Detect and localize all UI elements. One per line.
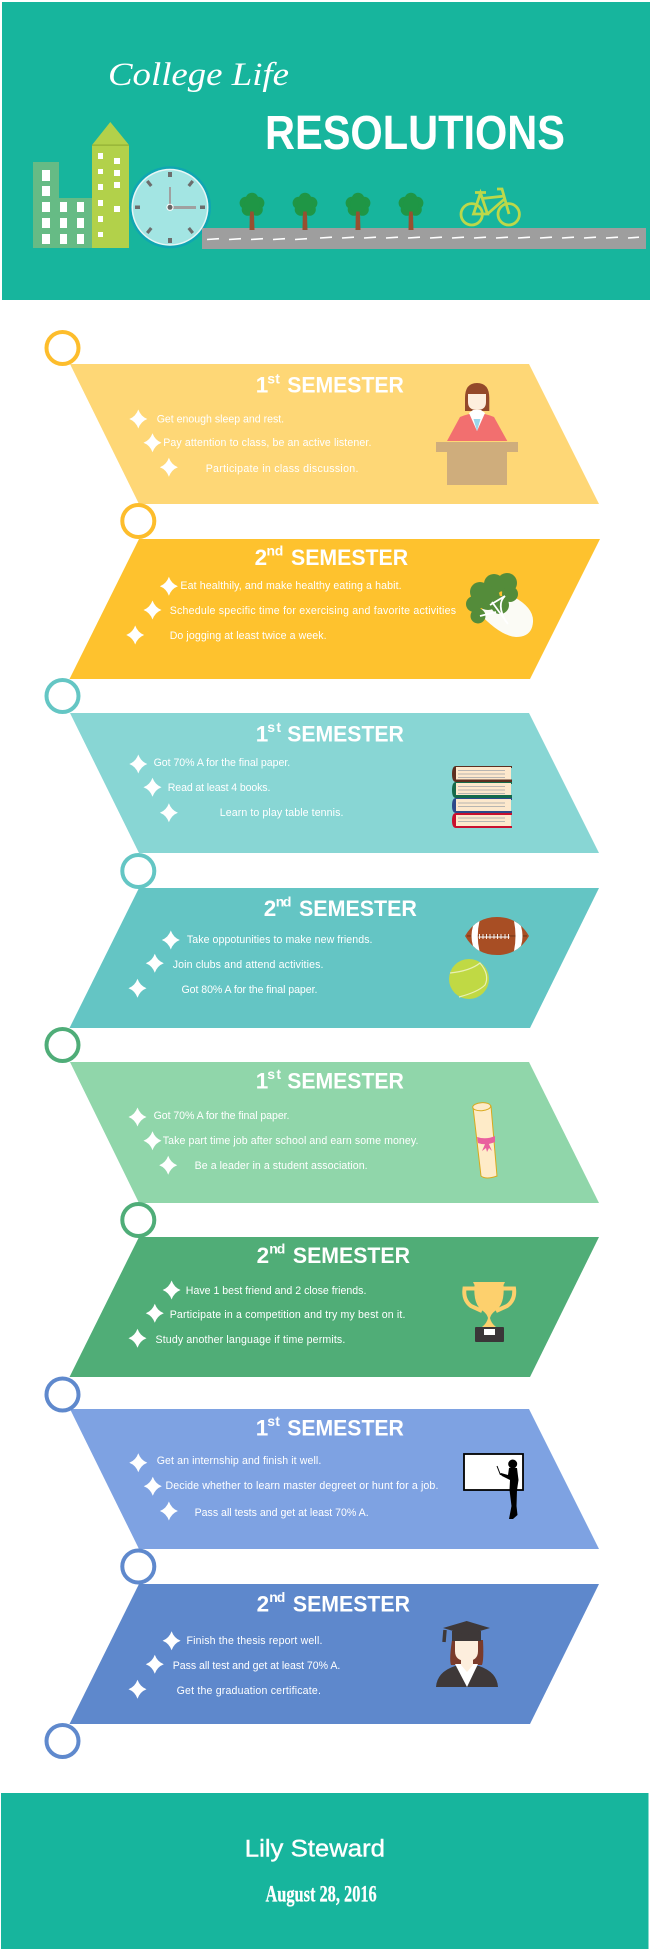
list text: Learn to play table tennis. [220,807,343,819]
heading: nd [269,1240,285,1256]
date: August 28, 2016 [266,1882,377,1907]
heading: SEMESTER [293,1592,410,1617]
list text [173,934,372,996]
ring marker [46,332,78,364]
list text [156,1285,405,1346]
panel: year 2, 1st semester [46,680,599,853]
heading: SEMESTER [291,545,408,570]
list text: Got 70% A for the final paper. [154,1110,290,1122]
author name: Lily Steward [245,1836,385,1863]
icon: graduate [436,1621,498,1687]
heading: nd [269,1589,285,1605]
list text: Got 80% A for the final paper. [182,984,317,996]
ring marker [122,1550,154,1582]
heading: SEMESTER [287,373,404,398]
ring marker: end of timeline [46,1725,78,1757]
heading [256,719,404,747]
heading: SEMESTER [299,896,417,921]
list text: Participate in class discussion. [206,463,358,475]
icon: tree 2 [293,193,317,230]
heading: 2 [264,896,276,921]
list text: Join clubs and attend activities. [173,959,324,971]
heading [264,893,417,921]
list text: Study another language if time permits. [156,1334,345,1346]
panel: year 3, 2nd semester [70,1204,599,1377]
icon: bicycle [461,189,519,225]
icon: lime tower [92,122,129,248]
panel: year 2, 2nd semester [70,855,599,1028]
bullet stars [128,1108,177,1175]
list text: Got 70% A for the final paper. [154,757,290,769]
heading: nd [266,542,283,558]
ring marker [46,1378,78,1410]
panel: year 1, 1st semester [46,332,599,504]
bullet stars [126,577,178,644]
ring marker [122,855,154,887]
list text: Be a leader in a student association. [195,1160,368,1172]
icon: tennis ball [449,959,489,999]
heading: st [267,719,281,735]
icon: trophy [464,1282,514,1342]
list text: Get an internship and finish it well. [157,1455,321,1467]
list text: Get enough sleep and rest. [157,413,284,425]
heading: SEMESTER [287,1416,404,1441]
icon: tree 3 [346,193,370,230]
icon: teacher at podium [436,383,518,485]
heading: SEMESTER [287,1069,404,1094]
list text: Schedule specific time for exercising and favorite activities [170,605,456,617]
list text: Decide whether to learn master degreet or hunt for a job. [166,1480,438,1492]
list text: Participate in a competition and try my best on it. [170,1309,405,1321]
heading [256,370,404,398]
heading [257,1589,410,1617]
list text: Take oppotunities to make new friends. [187,934,372,946]
ring marker [122,505,154,537]
bullet stars [128,930,180,998]
panel: year 1, 2nd semester [70,505,600,679]
footer banner [1,1793,648,1949]
list text: Take part time job after school and earn some money. [163,1135,418,1147]
heading: st [267,1066,281,1082]
heading: st [267,1413,280,1429]
icon: teacher silhouette at blackboard [464,1454,523,1519]
list text: Read at least 4 books. [168,782,270,794]
heading: 1 [256,722,268,747]
heading [257,1240,410,1268]
heading: SEMESTER [293,1243,410,1268]
icon: american football [465,917,529,955]
heading: 1 [256,373,268,398]
heading [256,1066,404,1094]
bullet stars [129,410,178,477]
heading: 2 [257,1243,269,1268]
icon: tree 1 [240,193,264,230]
panel: year 4, 2nd semester [70,1550,599,1724]
list text: Pass all tests and get at least 70% A. [195,1507,369,1519]
icon: green building [33,162,92,248]
header banner [2,2,650,300]
list text [170,580,456,642]
script title: College Life: College Life [108,57,289,93]
icon: bok choy [466,573,533,637]
heading [256,1413,404,1441]
heading: 2 [257,1592,269,1617]
icon: stack of books [452,766,512,828]
bullet stars [129,754,178,822]
bullet stars [128,1280,181,1348]
list text: Get the graduation certificate. [177,1685,321,1697]
ring marker [46,680,78,712]
list text [173,1635,340,1697]
bullet stars [128,1631,181,1699]
panel: year 4, 1st semester [46,1378,599,1549]
icon: diploma scroll [472,1102,497,1178]
list text: Eat healthily, and make healthy eating a habit. [180,580,402,592]
icon: tree 4 [399,193,423,230]
list text [154,1110,418,1172]
list text: Pass all test and get at least 70% A. [173,1660,340,1672]
list text: Do jogging at least twice a week. [170,630,327,642]
ring marker [46,1029,78,1061]
heading: SEMESTER [287,722,404,747]
heading: 1 [256,1416,268,1441]
heading: 1 [256,1069,268,1094]
list text: Have 1 best friend and 2 close friends. [186,1285,366,1297]
road [202,228,646,249]
heading: 2 [255,545,267,570]
list text: Finish the thesis report well. [186,1635,322,1647]
ring marker [122,1204,154,1236]
heading: st [267,370,280,386]
icon: clock [129,166,211,248]
list text: Pay attention to class, be an active listener. [163,437,371,449]
main title: RESOLUTIONS: RESOLUTIONS [265,107,565,160]
bullet stars [129,1453,178,1520]
heading: nd [276,893,291,909]
heading [255,542,408,570]
list text [154,757,343,819]
list text [157,1455,438,1519]
panel: year 3, 1st semester [46,1029,599,1203]
list text [157,413,371,475]
